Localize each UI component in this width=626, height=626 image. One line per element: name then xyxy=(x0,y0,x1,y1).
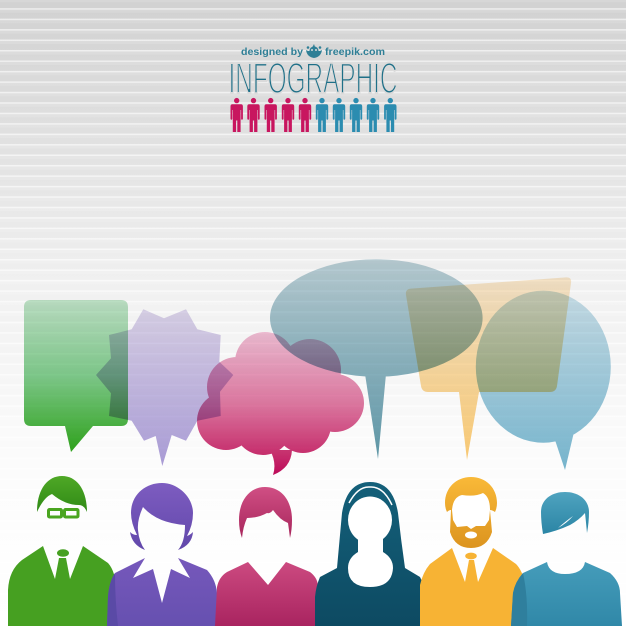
person: green man with glasses xyxy=(8,476,116,626)
face xyxy=(348,496,392,544)
person: orange bearded man xyxy=(420,477,526,626)
tie knot xyxy=(57,549,69,557)
face xyxy=(452,493,490,529)
suit xyxy=(420,548,526,626)
credit line: designed by freepik.com: designed by xyxy=(241,46,303,58)
mouth xyxy=(465,532,477,538)
person: teal woman in veil xyxy=(315,482,425,626)
person: purple woman xyxy=(107,483,217,626)
arm shading xyxy=(107,573,118,626)
person: magenta man xyxy=(215,487,318,626)
header xyxy=(228,44,398,132)
sweater xyxy=(215,562,318,626)
veil band xyxy=(349,487,392,505)
bubble: blue-grey ellipse xyxy=(270,259,483,459)
hair xyxy=(239,487,292,538)
person: blue man xyxy=(511,492,622,626)
veil and robe xyxy=(315,482,425,626)
hair xyxy=(541,492,589,534)
bubble: yellow trapezoid xyxy=(406,277,571,460)
bubble: purple starburst xyxy=(96,309,233,466)
suit xyxy=(8,546,116,626)
speech bubbles xyxy=(24,259,611,475)
icon: freepik logo xyxy=(306,44,322,58)
hair and beard xyxy=(445,477,497,548)
bubble: green rectangle xyxy=(24,300,128,452)
people xyxy=(8,476,622,626)
hair xyxy=(130,483,193,550)
icon: glasses xyxy=(48,510,78,517)
hair xyxy=(37,476,87,512)
title: INFOGRAPHIC: INFOGRAPHIC xyxy=(228,54,398,103)
neck xyxy=(348,535,393,587)
arm shading xyxy=(511,573,527,626)
bubble: light blue circle xyxy=(476,291,611,470)
hair highlight xyxy=(558,516,573,528)
pictogram row: ten people xyxy=(230,98,396,132)
credit line: designed by freepik.com: freepik.com xyxy=(325,46,385,58)
bubble: magenta cloud xyxy=(197,332,364,475)
shirt xyxy=(511,562,622,626)
blouse xyxy=(107,558,217,626)
tie knot xyxy=(465,553,477,559)
credit line: designed by freepik.com xyxy=(241,44,385,58)
